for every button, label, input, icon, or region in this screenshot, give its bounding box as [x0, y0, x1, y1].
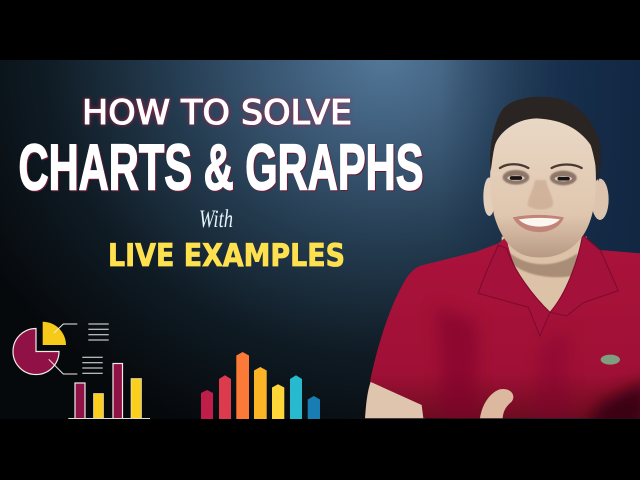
subtitle: with: With — [199, 206, 233, 233]
collar — [478, 235, 618, 336]
hand — [480, 389, 513, 418]
lips — [513, 215, 564, 232]
chart: small bar chart — [68, 364, 150, 420]
eye right — [555, 176, 572, 181]
arm — [365, 382, 425, 418]
title: how to solve: HOW TO SOLVE — [82, 93, 352, 133]
teeth — [519, 218, 560, 227]
ear right — [591, 179, 609, 220]
eyebrows — [500, 164, 582, 168]
hair — [490, 97, 601, 182]
neck shadow — [507, 250, 577, 277]
face — [490, 117, 596, 257]
person — [365, 97, 640, 427]
chart: colored arrow bars — [201, 352, 320, 420]
icon: pie chart — [13, 322, 77, 374]
eye sockets — [503, 170, 577, 185]
ear left — [483, 177, 495, 216]
logo — [601, 355, 620, 365]
eye left — [507, 175, 525, 181]
icon: legend lines bottom — [82, 357, 103, 373]
neck — [502, 237, 587, 315]
pupils — [512, 172, 568, 184]
shirt — [370, 235, 640, 418]
icon: legend lines top — [88, 324, 109, 340]
subtitle: live examples: LIVE EXAMPLES — [108, 238, 345, 274]
shirt shadows — [435, 307, 640, 427]
nose — [528, 180, 553, 209]
title: charts and graphs: CHARTS & GRAPHS — [18, 130, 424, 204]
background — [0, 60, 640, 420]
